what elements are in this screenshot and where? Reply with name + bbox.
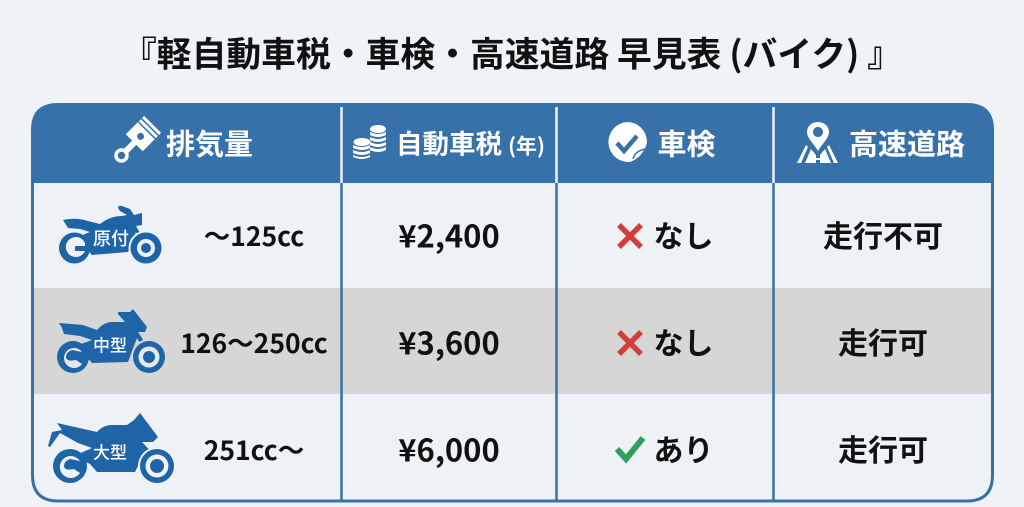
shaded row — [33, 288, 992, 394]
icon: motorcycle large — [48, 413, 176, 485]
icon: piston — [109, 116, 161, 168]
icon: green check — [614, 436, 646, 464]
displacement value: 251cc～ — [204, 428, 304, 467]
icon: motorcycle moped — [59, 206, 164, 266]
inspection value: なし — [654, 212, 714, 256]
title: 『軽自動車税・車検・高速道路 早見表 (バイク) 』 — [122, 27, 902, 77]
header label: annual car tax: 自動車税 (年) — [396, 122, 545, 162]
tax value: ¥2,400 — [398, 212, 500, 256]
row 1 — [93, 212, 943, 256]
icon: coin stacks — [353, 125, 386, 159]
expressway value: 走行不可 — [823, 212, 943, 256]
displacement value: ～125cc — [204, 214, 304, 253]
table header band — [31, 103, 994, 183]
header label: expressway: 高速道路 — [849, 122, 965, 164]
table outline — [32, 183, 992, 501]
tax value: ¥6,000 — [398, 426, 500, 470]
inspection value: なし — [654, 319, 714, 363]
header label: displacement: 排気量 — [166, 122, 253, 164]
icon: road map pin — [797, 122, 838, 163]
inspection value: あり — [654, 426, 714, 470]
icon: cross — [617, 223, 643, 249]
tax value: ¥3,600 — [398, 318, 500, 364]
row 2 — [93, 318, 928, 364]
label: large class: 大型 — [93, 438, 127, 464]
header label: inspection: 車検 — [657, 122, 716, 164]
expressway value: 走行可 — [838, 426, 928, 470]
expressway value: 走行可 — [838, 319, 928, 363]
icon: inspection check badge — [608, 122, 647, 162]
label: mid-size class: 中型 — [93, 332, 127, 356]
icon: cross — [617, 330, 643, 356]
row 3 — [93, 426, 928, 470]
table background — [32, 104, 993, 501]
icon: motorcycle mid-size — [57, 309, 167, 375]
displacement value: 126～250cc — [180, 321, 328, 360]
label: moped class: 原付 — [93, 225, 129, 251]
